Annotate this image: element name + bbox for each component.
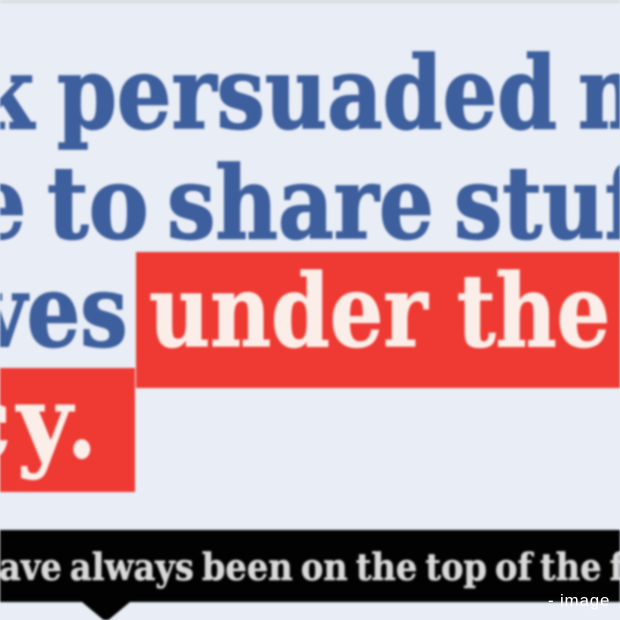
caption bar pointer: [82, 602, 130, 620]
headline line two: [0, 144, 620, 262]
caption bar: [0, 530, 620, 602]
headline line three, highlighted part: under the: [149, 252, 610, 370]
headline line one: persuaded: [57, 34, 557, 152]
caption text: ave always been on the top of the f: [0, 545, 620, 589]
highlight block: line three: [136, 252, 620, 388]
headline line two: share: [167, 144, 434, 262]
headline line two: to: [47, 144, 149, 262]
highlight block: line four: [0, 368, 135, 492]
watermark label: - image: [548, 591, 610, 610]
headline line four, highlighted part: [0, 372, 97, 482]
top edge strip: [0, 0, 620, 3]
